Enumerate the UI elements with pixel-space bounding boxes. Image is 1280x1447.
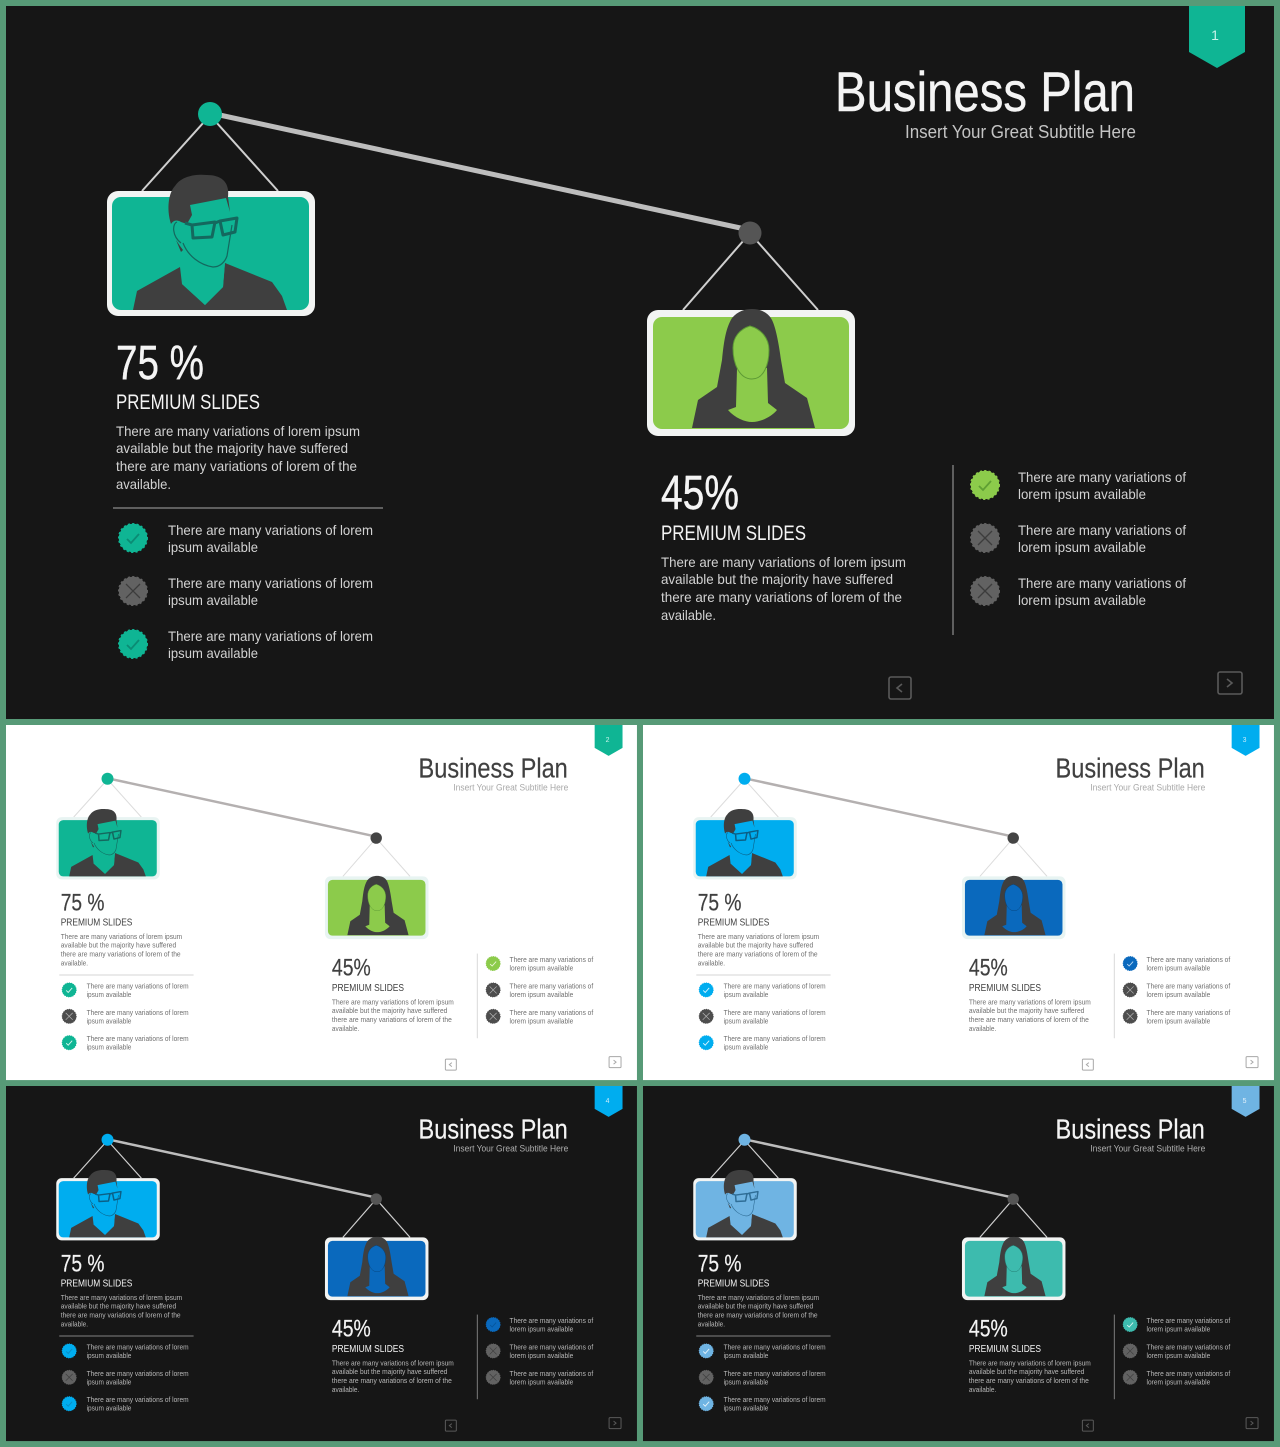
right checklist: lorem ipsum available [1147, 966, 1210, 973]
subtitle: Insert Your Great Subtitle Here [453, 1144, 568, 1154]
left checklist: There are many variations of lorem [724, 983, 826, 990]
nav: previous [445, 1420, 456, 1431]
left checklist [62, 983, 189, 1052]
left stat block: available. [61, 961, 88, 968]
left stat block: available but the majority have suffered [116, 440, 348, 456]
right stat block: There are many variations of lorem ipsum [661, 554, 906, 570]
right checklist: lorem ipsum available [1018, 486, 1146, 502]
right stat block: available but the majority have suffered [969, 1369, 1084, 1376]
title: Business Plan [419, 752, 568, 783]
right stat block: available. [332, 1387, 359, 1394]
left checklist: There are many variations of lorem [87, 1371, 189, 1378]
left stat block: There are many variations of lorem ipsum [698, 1295, 819, 1302]
nav: previous [1082, 1059, 1093, 1070]
panel: slide 4 dark blue [6, 1086, 637, 1441]
left stat block: available. [61, 1322, 88, 1329]
right stat block: there are many variations of lorem of the [969, 1378, 1089, 1385]
badge: page number: 1 [1211, 27, 1219, 43]
right stat block: 45% [332, 1315, 371, 1342]
connector beam [215, 114, 745, 229]
nav: previous [445, 1059, 456, 1070]
left checklist: ipsum available [87, 1406, 132, 1413]
title: Business Plan [419, 1113, 568, 1144]
title: Business Plan [835, 60, 1135, 123]
left stat block: There are many variations of lorem ipsum [61, 934, 182, 941]
right stat block: PREMIUM SLIDES [969, 983, 1041, 994]
right checklist: lorem ipsum available [510, 992, 573, 999]
right checklist: There are many variations of [1147, 1344, 1230, 1351]
right stat block: available. [969, 1387, 996, 1394]
nav: next [1246, 1418, 1258, 1429]
right stat block: There are many variations of lorem ipsum [969, 999, 1091, 1006]
right stat block: There are many variations of lorem ipsum [332, 1360, 454, 1367]
badge: page number [595, 725, 623, 756]
right stat block: There are many variations of lorem ipsum [969, 1360, 1091, 1367]
left checklist: ipsum available [724, 1406, 769, 1413]
left checklist [62, 1344, 189, 1413]
nav: next [609, 1418, 621, 1429]
left checklist: ipsum available [87, 1353, 132, 1360]
subtitle: Insert Your Great Subtitle Here [1090, 1144, 1205, 1154]
hanging frame: man portrait [693, 773, 797, 879]
right stat block: available. [332, 1026, 359, 1033]
nav: previous [1082, 1420, 1093, 1431]
right stat block: PREMIUM SLIDES [661, 522, 806, 545]
left stat block: available but the majority have suffered [698, 943, 813, 950]
right stat block [661, 467, 906, 623]
right stat block [969, 954, 1091, 1033]
right checklist: There are many variations of [1018, 469, 1186, 485]
left checklist [119, 522, 373, 661]
left checklist: There are many variations of lorem [87, 1397, 189, 1404]
left stat block: 75 % [116, 337, 204, 390]
left checklist: ipsum available [724, 1045, 769, 1052]
left stat block: There are many variations of lorem ipsum [698, 934, 819, 941]
left stat block: available. [698, 961, 725, 968]
left stat block: There are many variations of lorem ipsum [61, 1295, 182, 1302]
connector beam [110, 779, 374, 836]
left checklist: There are many variations of lorem [87, 1010, 189, 1017]
right stat block: 45% [661, 467, 739, 520]
connector beam [747, 1140, 1011, 1197]
left stat block [698, 890, 819, 968]
left stat block: PREMIUM SLIDES [61, 918, 132, 929]
right stat block [332, 1315, 454, 1394]
left checklist: There are many variations of lorem [87, 983, 189, 990]
right checklist: lorem ipsum available [510, 1379, 573, 1386]
hanging frame: man portrait [693, 1134, 797, 1240]
right checklist [971, 469, 1186, 608]
right checklist: lorem ipsum available [510, 1018, 573, 1025]
left checklist: There are many variations of lorem [724, 1036, 826, 1043]
left checklist [699, 1344, 826, 1413]
right stat block: available but the majority have suffered [332, 1008, 447, 1015]
badge: page number [1189, 6, 1245, 68]
right checklist: lorem ipsum available [510, 1353, 573, 1360]
left stat block: available but the majority have suffered [698, 1304, 813, 1311]
left checklist: There are many variations of lorem [724, 1397, 826, 1404]
left checklist: ipsum available [87, 992, 132, 999]
left checklist: There are many variations of lorem [724, 1010, 826, 1017]
right checklist: lorem ipsum available [1147, 992, 1210, 999]
right stat block: available. [661, 607, 716, 623]
left checklist: There are many variations of lorem [168, 628, 373, 644]
right checklist: There are many variations of [1018, 522, 1186, 538]
nav: next [1246, 1057, 1258, 1068]
right stat block: PREMIUM SLIDES [332, 1344, 404, 1355]
right checklist: lorem ipsum available [1018, 539, 1146, 555]
left stat block: 75 % [698, 890, 742, 917]
left stat block [61, 1251, 182, 1329]
badge: page number: 5 [1243, 1098, 1247, 1105]
right stat block: there are many variations of lorem of the [332, 1378, 452, 1385]
hanging frame: man portrait [107, 102, 315, 316]
left checklist: ipsum available [87, 1379, 132, 1386]
left checklist: ipsum available [724, 1018, 769, 1025]
right checklist: There are many variations of [510, 983, 593, 990]
panel: slide 3 light blue [643, 725, 1274, 1080]
right checklist: lorem ipsum available [1147, 1018, 1210, 1025]
right stat block: 45% [969, 1315, 1008, 1342]
subtitle: Insert Your Great Subtitle Here [453, 783, 568, 793]
subtitle: Insert Your Great Subtitle Here [905, 122, 1136, 142]
left checklist: There are many variations of lorem [724, 1344, 826, 1351]
left stat block: available but the majority have suffered [61, 943, 176, 950]
connector beam [110, 1140, 374, 1197]
left checklist: There are many variations of lorem [168, 575, 373, 591]
right stat block [969, 1315, 1091, 1394]
hanging frame: man portrait [56, 773, 160, 879]
left stat block [61, 890, 182, 968]
hanging frame: woman portrait [325, 1193, 428, 1300]
connector beam [747, 779, 1011, 836]
right stat block: PREMIUM SLIDES [332, 983, 404, 994]
badge: page number [595, 1086, 623, 1117]
left stat block: PREMIUM SLIDES [698, 918, 769, 929]
badge: page number: 3 [1243, 737, 1247, 744]
right checklist: There are many variations of [1147, 1318, 1230, 1325]
right checklist: There are many variations of [510, 1371, 593, 1378]
left stat block: there are many variations of lorem of the [61, 952, 181, 959]
left stat block: there are many variations of lorem of the [116, 458, 357, 474]
right checklist: There are many variations of [510, 1344, 593, 1351]
hanging frame: woman portrait [962, 1193, 1065, 1300]
right checklist: There are many variations of [510, 1318, 593, 1325]
left checklist: ipsum available [87, 1045, 132, 1052]
subtitle: Insert Your Great Subtitle Here [1090, 783, 1205, 793]
panel: slide 5 dark pale blue and teal [643, 1086, 1274, 1441]
left checklist: ipsum available [724, 1379, 769, 1386]
left checklist [699, 983, 826, 1052]
left checklist: ipsum available [168, 592, 258, 608]
right stat block: 45% [969, 954, 1008, 981]
right stat block: available but the majority have suffered [969, 1008, 1084, 1015]
right checklist: There are many variations of [1147, 1371, 1230, 1378]
right checklist: lorem ipsum available [1147, 1379, 1210, 1386]
right checklist: There are many variations of [1018, 575, 1186, 591]
right stat block: There are many variations of lorem ipsum [332, 999, 454, 1006]
hanging frame: woman portrait [647, 222, 855, 436]
right stat block: there are many variations of lorem of the [969, 1017, 1089, 1024]
right checklist: There are many variations of [1147, 983, 1230, 990]
right checklist [1123, 956, 1230, 1025]
right stat block: 45% [332, 954, 371, 981]
left checklist: ipsum available [724, 1353, 769, 1360]
nav: next [609, 1057, 621, 1068]
left stat block: PREMIUM SLIDES [61, 1279, 132, 1290]
right checklist [486, 1317, 593, 1386]
right checklist: There are many variations of [510, 1010, 593, 1017]
right stat block: available but the majority have suffered [332, 1369, 447, 1376]
left stat block [116, 337, 360, 492]
right checklist: lorem ipsum available [510, 966, 573, 973]
badge: page number: 4 [606, 1098, 610, 1105]
left stat block [698, 1251, 819, 1329]
panel: slide 2 light teal and green [6, 725, 637, 1080]
title: Business Plan [1056, 1113, 1205, 1144]
left stat block: 75 % [698, 1251, 742, 1278]
nav: previous [889, 677, 911, 699]
right stat block: there are many variations of lorem of the [661, 589, 902, 605]
right stat block: there are many variations of lorem of the [332, 1017, 452, 1024]
left checklist: There are many variations of lorem [724, 1371, 826, 1378]
left checklist: ipsum available [168, 645, 258, 661]
badge: page number [1232, 1086, 1260, 1117]
right checklist [1123, 1317, 1230, 1386]
nav: next [1218, 672, 1242, 694]
left checklist: There are many variations of lorem [87, 1036, 189, 1043]
left stat block: there are many variations of lorem of the [698, 1313, 818, 1320]
right stat block: PREMIUM SLIDES [969, 1344, 1041, 1355]
badge: page number: 2 [606, 737, 610, 744]
left checklist: There are many variations of lorem [168, 522, 373, 538]
badge: page number [1232, 725, 1260, 756]
left stat block: available. [698, 1322, 725, 1329]
left checklist: ipsum available [87, 1018, 132, 1025]
hanging frame: man portrait [56, 1134, 160, 1240]
left stat block: 75 % [61, 890, 105, 917]
right checklist: lorem ipsum available [1147, 1353, 1210, 1360]
hanging frame: woman portrait [325, 832, 428, 939]
right stat block: available but the majority have suffered [661, 571, 893, 587]
left stat block: There are many variations of lorem ipsum [116, 423, 360, 439]
left checklist: There are many variations of lorem [87, 1344, 189, 1351]
right checklist: lorem ipsum available [510, 1327, 573, 1334]
right checklist [486, 956, 593, 1025]
left stat block: available. [116, 476, 171, 492]
right checklist: There are many variations of [1147, 957, 1230, 964]
left checklist: ipsum available [168, 539, 258, 555]
left stat block: there are many variations of lorem of the [698, 952, 818, 959]
left stat block: PREMIUM SLIDES [116, 391, 260, 414]
right checklist: lorem ipsum available [1018, 592, 1146, 608]
right stat block: available. [969, 1026, 996, 1033]
left stat block: available but the majority have suffered [61, 1304, 176, 1311]
left stat block: 75 % [61, 1251, 105, 1278]
right stat block [332, 954, 454, 1033]
right checklist: There are many variations of [1147, 1010, 1230, 1017]
hanging frame: woman portrait [962, 832, 1065, 939]
title: Business Plan [1056, 752, 1205, 783]
panel: slide 1 dark teal and green [6, 6, 1274, 719]
left stat block: there are many variations of lorem of the [61, 1313, 181, 1320]
right checklist: There are many variations of [510, 957, 593, 964]
right checklist: lorem ipsum available [1147, 1327, 1210, 1334]
left stat block: PREMIUM SLIDES [698, 1279, 769, 1290]
left checklist: ipsum available [724, 992, 769, 999]
